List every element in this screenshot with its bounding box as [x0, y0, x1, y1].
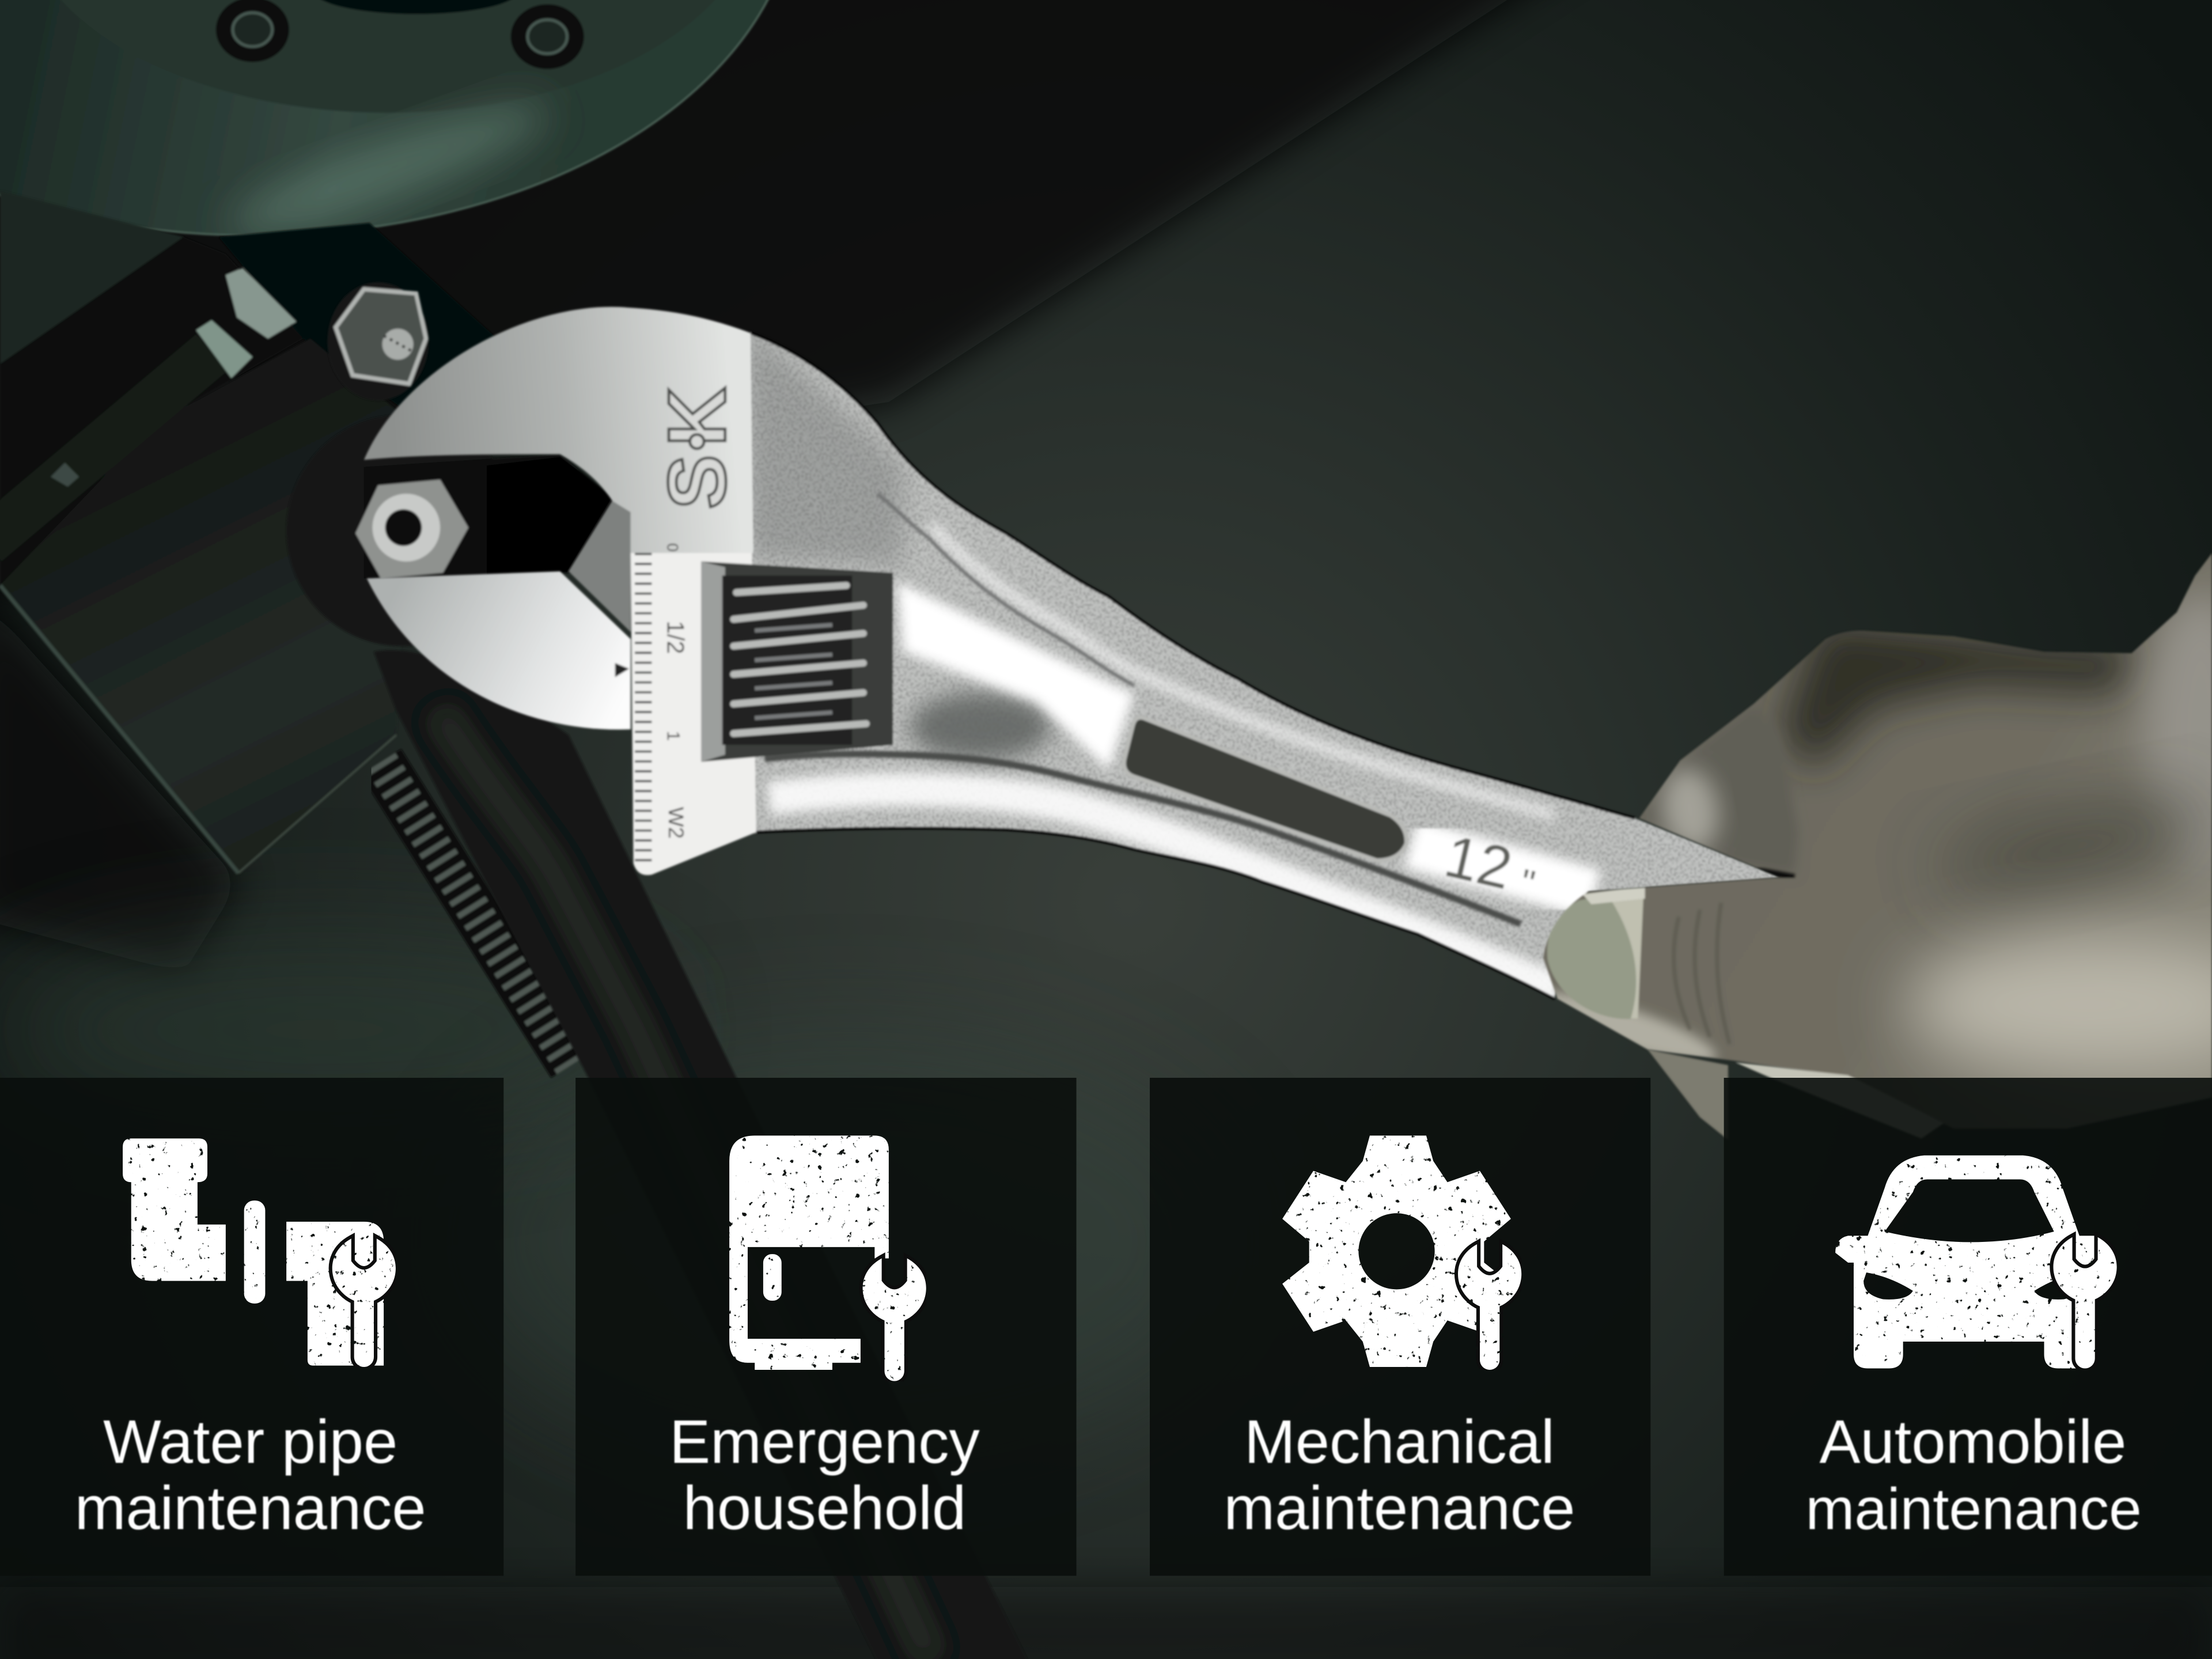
- thumb nail: [1547, 889, 1639, 1019]
- worm gear window: [701, 562, 893, 762]
- washer and nut: [286, 415, 615, 646]
- index finger: [1639, 704, 1798, 874]
- hand gripping wrench: [1522, 550, 2212, 1143]
- lower jaw: [367, 571, 631, 730]
- machine disk: [0, 0, 797, 253]
- label: maintenance: [1224, 1474, 1575, 1543]
- label: Water pipe: [103, 1408, 397, 1476]
- thumb: [1522, 978, 1722, 1076]
- measuring scale: 1: [663, 731, 684, 741]
- label: maintenance: [75, 1474, 426, 1543]
- label: [75, 1408, 426, 1543]
- measuring scale: 1/2: [662, 621, 689, 654]
- panel: mechanical maintenance: [1150, 1078, 1650, 1576]
- mounting bracket and pipe: [0, 191, 505, 873]
- panel: automobile maintenance: [1724, 1078, 2212, 1576]
- lower wrench strip under the palm: [1735, 1062, 1944, 1138]
- measuring scale: [631, 543, 756, 875]
- label: Automobile: [1819, 1408, 2126, 1476]
- label: Mechanical: [1244, 1408, 1555, 1476]
- size stamp: 12: [1439, 823, 1518, 902]
- panel: water pipe maintenance: [0, 1078, 503, 1576]
- fingertip behind the panels: [1647, 1050, 1728, 1140]
- label: household: [683, 1474, 966, 1543]
- shadow across the back of the hand: [1781, 621, 2137, 769]
- icon: pipe with wrench: [123, 1138, 396, 1367]
- panel: emergency household: [575, 1078, 1077, 1576]
- label: maintenance: [1805, 1476, 2142, 1542]
- label: [669, 1408, 980, 1543]
- icon: car with wrench: [1835, 1156, 2117, 1369]
- upper jaw: [364, 307, 753, 553]
- icon: gear with wrench: [1282, 1135, 1521, 1370]
- label: Emergency: [669, 1408, 980, 1476]
- label: [1805, 1408, 2142, 1542]
- throat of the jaw: [569, 501, 631, 632]
- adjustable wrench: [364, 307, 1806, 1016]
- body outline: [751, 333, 1635, 818]
- highlights and folds: [2144, 593, 2212, 874]
- coil spring: [381, 762, 571, 1065]
- brand mark: SK: [652, 378, 743, 509]
- black lever: [374, 650, 1037, 1659]
- wrench handle and body: [749, 332, 1779, 999]
- label: [1224, 1408, 1575, 1543]
- adjustable wrench: ": [1516, 861, 1539, 906]
- measuring scale: W2: [664, 807, 688, 839]
- hex nut and bolt: [327, 282, 429, 401]
- scale marks: 0: [664, 543, 681, 552]
- icon: refrigerator with wrench: [729, 1135, 926, 1381]
- handle slot: [1124, 717, 1407, 861]
- body grain: [751, 333, 1773, 999]
